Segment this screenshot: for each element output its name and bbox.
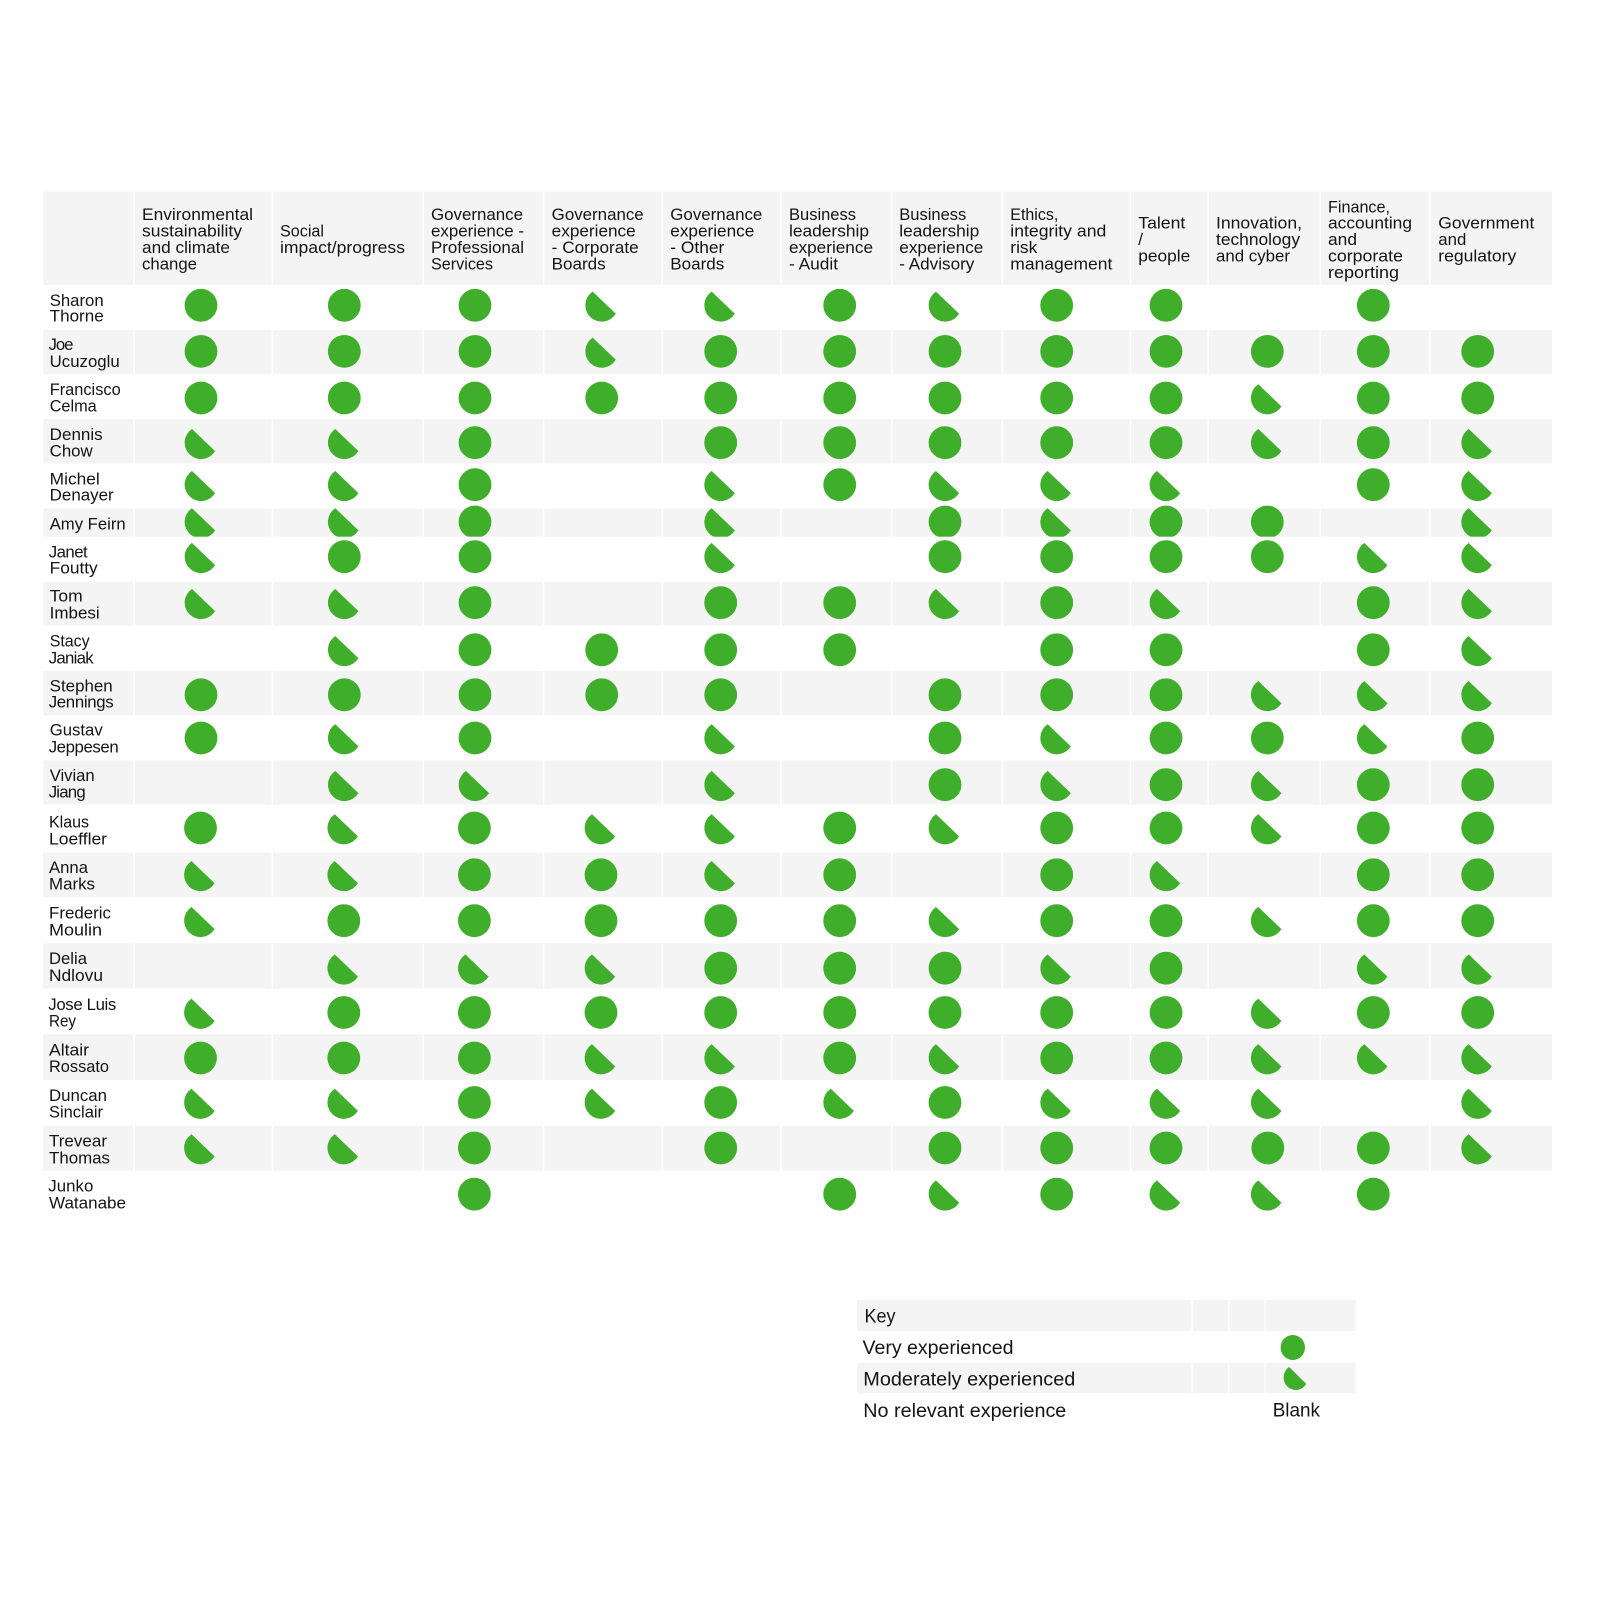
column heading: Innovation, technology and cyber: Innovation,	[1216, 214, 1302, 233]
column heading: Governance experience - Corporate Boards: - Corporate	[552, 238, 639, 257]
row: Trevear Thomas: Thomas	[49, 1148, 110, 1167]
row: Altair Rossato: Rossato	[49, 1057, 109, 1076]
row: Altair Rossato: Altair	[49, 1040, 89, 1059]
row: Anna Marks: Marks	[49, 874, 95, 893]
row: Joe Ucuzoglu	[43, 330, 1552, 374]
row: Tom Imbesi: Imbesi	[50, 603, 100, 622]
row: Jose Luis Rey: Rey	[49, 1011, 77, 1030]
row: Sharon Thorne: Thorne	[50, 307, 104, 326]
row: Junko Watanabe: Junko	[48, 1177, 93, 1196]
row: Klaus Loeffler: Loeffler	[49, 829, 107, 848]
column heading: Innovation, technology and cyber	[1216, 214, 1302, 266]
column heading: Governance experience - Corporate Boards: Boards	[552, 254, 606, 273]
column heading: Ethics, integrity and risk management	[1010, 205, 1113, 273]
row: Delia Ndlovu	[43, 943, 1552, 989]
column heading: Business leadership experience - Audit	[789, 205, 873, 273]
row: Duncan Sinclair: Duncan	[49, 1086, 107, 1105]
legend: key	[857, 1300, 1356, 1422]
row: Duncan Sinclair	[43, 1080, 1552, 1126]
row: Frederic Moulin: Moulin	[49, 921, 102, 940]
row: Janet Foutty	[43, 537, 1552, 582]
column heading: Government and regulatory: regulatory	[1438, 247, 1517, 266]
column heading: Finance, accounting and corporate reporting: reporting	[1328, 263, 1399, 282]
row: Delia Ndlovu: Delia	[49, 949, 88, 968]
column heading: Environmental sustainability and climate change	[142, 205, 253, 273]
column heading: Business leadership experience - Audit: - Audit	[789, 254, 838, 273]
column heading: Government and regulatory: Government	[1438, 214, 1535, 233]
column heading: Governance experience - Professional Services: Governance	[431, 205, 523, 224]
column heading: Social impact/progress	[280, 222, 405, 257]
column heading: Talent / people: Talent	[1138, 214, 1186, 233]
column heading: Business leadership experience - Advisory	[899, 205, 983, 273]
row: Junko Watanabe	[43, 1171, 1552, 1216]
row: Delia Ndlovu: Ndlovu	[49, 966, 103, 985]
column heading: Government and regulatory	[1438, 214, 1535, 266]
row: Frederic Moulin	[43, 897, 1552, 943]
row: Gustav Jeppesen: Gustav	[50, 721, 103, 740]
column heading: Governance experience - Professional Services: Services	[431, 254, 493, 273]
column heading: Talent / people: /	[1138, 230, 1143, 249]
column heading: Business leadership experience - Advisory: Business	[899, 205, 966, 224]
column heading: Governance experience - Other Boards: Boards	[670, 254, 724, 273]
column heading: Government and regulatory: and	[1438, 230, 1466, 249]
row: Michel Denayer: Denayer	[50, 486, 114, 505]
column heading: Governance experience - Professional Services: Professional	[431, 238, 524, 257]
legend row: no relevant experience	[863, 1401, 1320, 1422]
column heading: Finance, accounting and corporate reporting: and	[1328, 230, 1357, 249]
legend row: no relevant experience: Blank	[1273, 1401, 1320, 1422]
row: Sharon Thorne	[43, 285, 1552, 330]
legend row: no relevant experience: No relevant experience	[863, 1401, 1066, 1422]
column heading: Governance experience - Corporate Boards: Governance	[552, 205, 644, 224]
column heading: Ethics, integrity and risk management: integrity and	[1010, 222, 1106, 240]
row: Francisco Celma: Celma	[50, 397, 97, 416]
column heading: Environmental sustainability and climate change: sustainability	[142, 222, 243, 240]
legend header: Key	[864, 1307, 896, 1328]
row: Frederic Moulin: Frederic	[49, 904, 111, 923]
row: Stephen Jennings: Stephen	[50, 676, 113, 695]
column heading: Finance, accounting and corporate reporting	[1328, 198, 1412, 282]
row: Joe Ucuzoglu: Ucuzoglu	[50, 352, 120, 371]
row: Anna Marks	[43, 852, 1552, 897]
column heading: Business leadership experience - Audit: Business	[789, 205, 856, 224]
column heading: Governance experience - Other Boards: - Other	[670, 238, 725, 257]
legend row: moderately experienced	[857, 1363, 1356, 1393]
row: Vivian Jiang	[43, 760, 1552, 805]
column heading: Finance, accounting and corporate reporting: accounting	[1328, 214, 1412, 233]
column heading: Ethics, integrity and risk management: Ethics,	[1010, 205, 1058, 224]
column heading: Business leadership experience - Audit: experience	[789, 238, 873, 257]
column heading: Environmental sustainability and climate change: Environmental	[142, 205, 253, 224]
column heading: Governance experience - Other Boards: Governance	[670, 205, 762, 224]
row: Amy Feirn: Amy Feirn	[50, 514, 126, 533]
legend row: moderately experienced: Moderately experienced	[863, 1370, 1075, 1391]
row: Michel Denayer	[43, 464, 1552, 509]
row: Janet Foutty: Janet	[49, 542, 88, 561]
row: Vivian Jiang: Vivian	[50, 766, 95, 785]
row: Klaus Loeffler: Klaus	[49, 813, 89, 832]
legend row: very experienced	[862, 1335, 1305, 1360]
column heading: Social impact/progress: impact/progress	[280, 238, 405, 257]
column heading: Talent / people: people	[1138, 247, 1190, 266]
row: Dennis Chow	[43, 419, 1552, 464]
column heading: Governance experience - Other Boards: experience	[670, 222, 754, 240]
column heading: Governance experience - Professional Services: experience -	[431, 222, 524, 240]
column heading: Ethics, integrity and risk management: risk	[1010, 238, 1038, 257]
row: Jose Luis Rey: Jose Luis	[48, 995, 116, 1014]
header row	[43, 192, 1552, 285]
column heading: Innovation, technology and cyber: and cyber	[1216, 247, 1290, 266]
row: Jose Luis Rey	[43, 989, 1552, 1034]
row: Stephen Jennings	[43, 671, 1552, 715]
row: Duncan Sinclair: Sinclair	[49, 1102, 103, 1121]
row: Stacy Janiak: Janiak	[49, 648, 94, 667]
column heading: Innovation, technology and cyber: technology	[1216, 230, 1301, 249]
column heading: Governance experience - Professional Services	[431, 205, 524, 273]
row: Michel Denayer: Michel	[50, 469, 100, 488]
row: Janet Foutty: Foutty	[50, 559, 98, 578]
row: Tom Imbesi: Tom	[50, 587, 83, 606]
row: Sharon Thorne: Sharon	[50, 291, 104, 310]
row: Trevear Thomas: Trevear	[49, 1132, 107, 1151]
column heading: Governance experience - Corporate Boards	[552, 205, 644, 273]
row: Joe Ucuzoglu: Joe	[48, 335, 74, 354]
column heading: Social impact/progress: Social	[280, 222, 324, 240]
column heading: Governance experience - Other Boards	[670, 205, 762, 273]
row: Francisco Celma	[43, 374, 1552, 419]
row: Klaus Loeffler	[43, 805, 1552, 852]
column heading: Environmental sustainability and climate change: and climate	[142, 238, 230, 257]
column heading: Environmental sustainability and climate change: change	[142, 254, 197, 273]
row: Gustav Jeppesen: Jeppesen	[49, 738, 119, 757]
row: Francisco Celma: Francisco	[50, 380, 121, 399]
row: Stephen Jennings: Jennings	[49, 693, 114, 712]
column heading: Business leadership experience - Advisory: leadership	[899, 222, 979, 240]
column heading: Governance experience - Corporate Boards: experience	[552, 222, 636, 240]
row: Anna Marks: Anna	[49, 858, 89, 877]
legend header	[857, 1300, 1356, 1331]
row: Dennis Chow: Dennis	[50, 425, 103, 444]
row: Junko Watanabe: Watanabe	[49, 1194, 126, 1213]
row: Trevear Thomas	[43, 1126, 1552, 1171]
column heading: Talent / people	[1138, 214, 1190, 266]
column heading: Ethics, integrity and risk management: management	[1010, 254, 1113, 273]
row: Altair Rossato	[43, 1034, 1552, 1080]
column heading: Business leadership experience - Audit: leadership	[789, 222, 869, 240]
row: Dennis Chow: Chow	[50, 441, 94, 460]
row: Amy Feirn	[43, 506, 1552, 538]
row: Gustav Jeppesen	[43, 715, 1552, 760]
row: Stacy Janiak	[43, 626, 1552, 671]
row: Vivian Jiang: Jiang	[49, 783, 86, 802]
legend row: very experienced: Very experienced	[862, 1338, 1014, 1359]
row: Tom Imbesi	[43, 582, 1552, 626]
column heading: Business leadership experience - Advisory: - Advisory	[899, 254, 975, 273]
column heading: Finance, accounting and corporate reporting: Finance,	[1328, 198, 1390, 217]
column heading: Business leadership experience - Advisory: experience	[899, 238, 983, 257]
column heading: Finance, accounting and corporate reporting: corporate	[1328, 247, 1403, 266]
row: Stacy Janiak: Stacy	[50, 632, 90, 651]
